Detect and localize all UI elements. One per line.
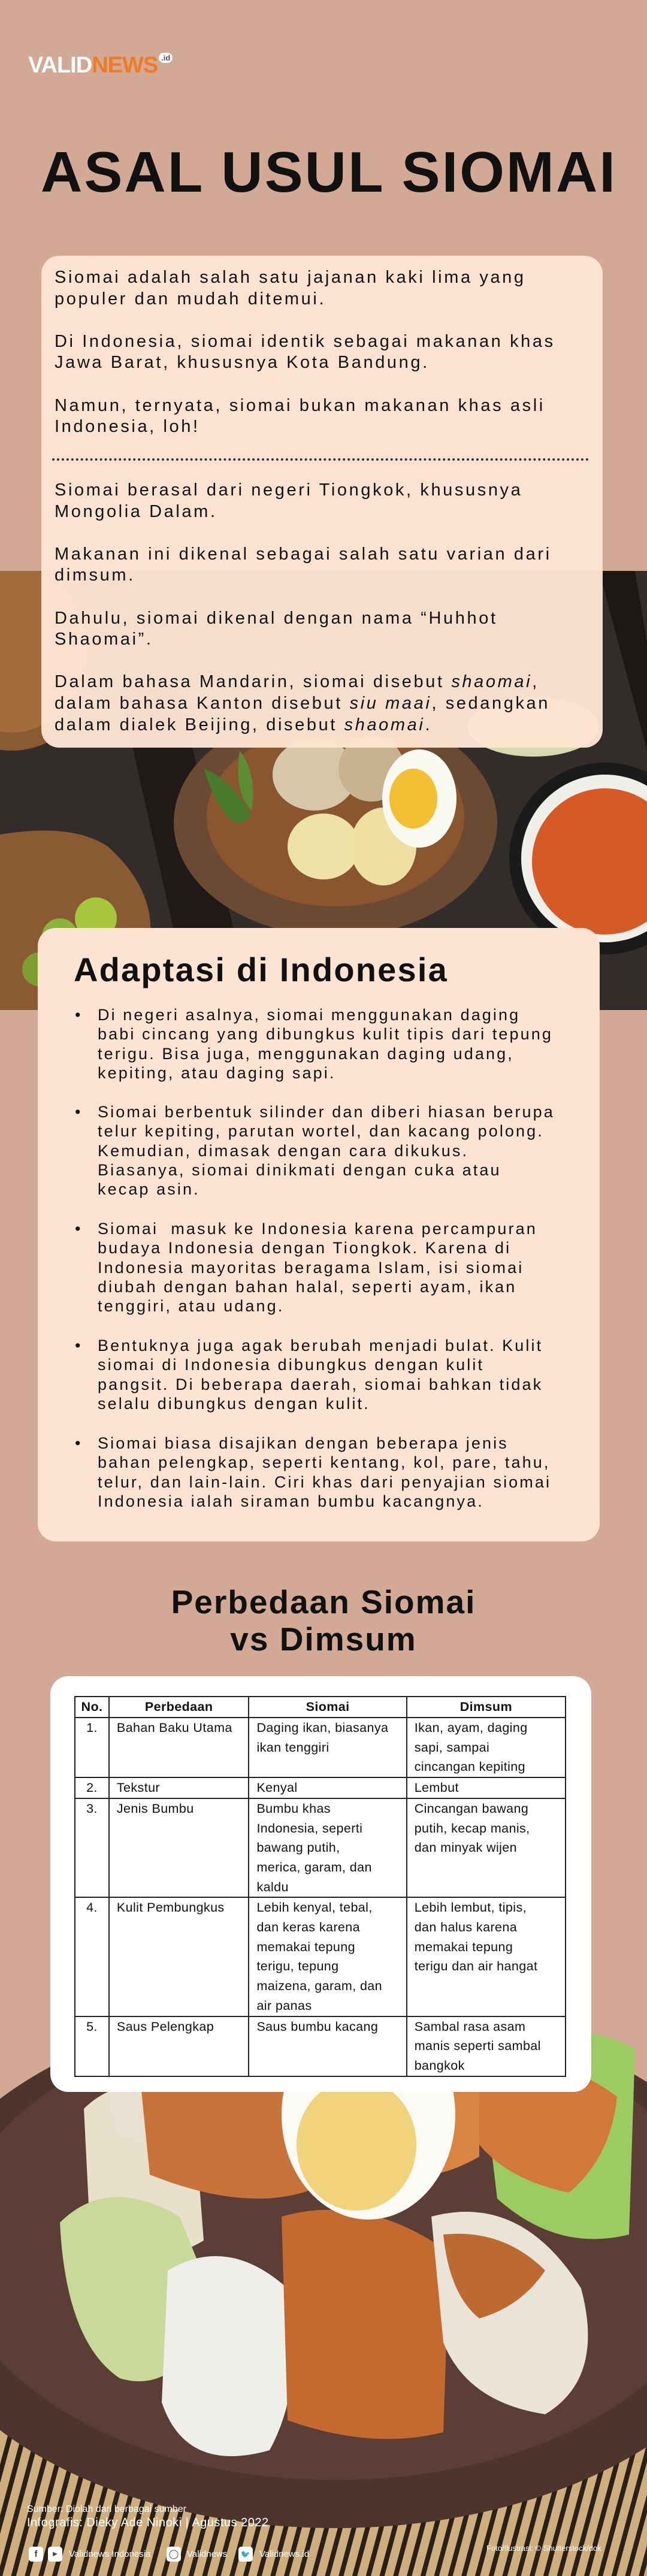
bullet list: tenggiri, atau udang. <box>98 1297 284 1315</box>
text block: intro: populer dan mudah ditemui. <box>55 289 326 309</box>
bullet list: telur, dan lain-lain. Ciri khas dari penyajian siomai <box>98 1473 551 1491</box>
bullet list: budaya Indonesia dengan Tiongkok. Karena di <box>98 1239 511 1257</box>
bottom photo: siomai plate with peanut sauce <box>0 2033 647 2576</box>
text block: origin: Siomai berasal dari negeri Tiongkok, khususnya <box>55 480 522 500</box>
table: Bahan Baku Utama <box>117 1721 232 1735</box>
bullet list: • <box>75 1103 83 1121</box>
table: kaldu <box>256 1880 289 1894</box>
bullet list: Siomai biasa disajikan dengan beberapa jenis <box>98 1434 509 1452</box>
panel: asal usul <box>41 256 603 748</box>
text block: origin: Mongolia Dalam. <box>55 502 217 521</box>
bullet list: kecap asin. <box>98 1180 200 1198</box>
text block: origin: Dalam bahasa Mandarin, siomai disebut shaomai, <box>55 672 539 691</box>
text block: origin: dalam dialek Beijing, disebut shaomai. <box>55 715 432 734</box>
table: merica, garam, dan <box>256 1860 372 1874</box>
table: Dimsum <box>460 1700 512 1714</box>
table: Lebih lembut, tipis, <box>415 1900 527 1915</box>
text block: intro <box>55 268 555 436</box>
bullet list: Indonesia mayoritas beragama Islam, isi siomai <box>98 1259 524 1277</box>
table: air panas <box>256 1998 312 2013</box>
table: 3. <box>86 1801 98 1816</box>
bullet list: pangsit. Di beberapa daerah, siomai bahkan tidak <box>98 1375 543 1393</box>
table: Tekstur <box>117 1780 160 1795</box>
table: 1. <box>86 1721 98 1735</box>
table <box>74 1696 566 2077</box>
bullet list: bahan pelengkap, seperti kentang, kol, pare, tahu, <box>98 1453 550 1471</box>
table: No. <box>81 1700 102 1714</box>
table: Indonesia, seperti <box>256 1821 362 1836</box>
table: bangkok <box>415 2058 465 2073</box>
bullet list: kepiting, atau daging sapi. <box>98 1064 335 1082</box>
table: maizena, garam, dan <box>256 1979 382 1993</box>
table: bawang putih, <box>256 1840 340 1855</box>
heading: Adaptasi di Indonesia <box>74 951 448 988</box>
text block: intro: Jawa Barat, khususnya Kota Bandung. <box>55 353 430 372</box>
table: Lebih kenyal, tebal, <box>256 1900 373 1915</box>
photo credit: Foto/Ilustrasi: © Shutterstock/dok <box>486 2544 601 2553</box>
bullet list: Kemudian, dimasak dengan cara dikukus. <box>98 1142 468 1160</box>
heading: perbedaan siomai vs dimsum <box>171 1583 476 1658</box>
logo: VALIDNEWS.id: VALIDNEWS <box>28 53 158 78</box>
text block: origin: Shaomai”. <box>55 630 153 649</box>
table: Kenyal <box>256 1780 298 1795</box>
bullet list: selalu dibungkus dengan kulit. <box>98 1395 370 1413</box>
bullet list: Bentuknya juga agak berubah menjadi bulat. Kulit <box>98 1337 543 1354</box>
bullet list: telur kepiting, parutan wortel, dan kacang polong. <box>98 1122 544 1140</box>
bullet list: • <box>75 1006 83 1024</box>
table: manis seperti sambal <box>415 2039 541 2053</box>
bullet list: terigu. Bisa juga, menggunakan daging udang, <box>98 1045 514 1063</box>
bullet list: Siomai berbentuk silinder dan diberi hiasan berupa <box>98 1103 555 1121</box>
logo: VALIDNEWS.id: .id <box>161 53 170 62</box>
bullet list: siomai di Indonesia dibungkus dengan kulit <box>98 1356 484 1374</box>
table: memakai tepung <box>256 1940 355 1954</box>
text block: origin <box>55 480 552 734</box>
footer: source & credit <box>27 2504 269 2529</box>
footer: social icons: Validnews Indonesia <box>69 2549 150 2559</box>
table: 4. <box>86 1900 98 1915</box>
table: Ikan, ayam, daging <box>415 1721 528 1735</box>
table: Daging ikan, biasanya ikan tenggiri <box>256 1721 388 1755</box>
table: Bumbu khas <box>256 1801 331 1816</box>
icon: twitter: 🐦 <box>241 2550 250 2559</box>
icon: instagram <box>167 2547 181 2562</box>
table: Lembut <box>415 1780 459 1795</box>
footer: social icons: Validnews <box>187 2549 227 2559</box>
table: dan minyak wijen <box>415 1840 517 1855</box>
table: Saus Pelengkap <box>117 2019 214 2034</box>
bullet list: Di negeri asalnya, siomai menggunakan daging <box>98 1006 520 1024</box>
table: cincangan kepiting <box>415 1759 525 1774</box>
panel: adaptasi di Indonesia <box>38 928 600 1541</box>
table: terigu, tepung <box>256 1959 339 1973</box>
heading: perbedaan siomai vs dimsum: vs Dimsum <box>230 1620 417 1658</box>
icon: twitter <box>238 2547 253 2562</box>
table: Jenis Bumbu <box>117 1801 194 1816</box>
text block: origin: dimsum. <box>55 566 135 585</box>
table: Siomai <box>306 1700 350 1714</box>
icon: instagram: ◯ <box>169 2549 179 2559</box>
text block: intro: Namun, ternyata, siomai bukan makanan khas asli <box>55 396 545 415</box>
table: dan keras karena <box>256 1920 360 1934</box>
text block: origin: Dahulu, siomai dikenal dengan nama “Huhhot <box>55 609 498 628</box>
text block: intro: Di Indonesia, siomai identik sebagai makanan khas <box>55 332 555 351</box>
table: Saus bumbu kacang <box>256 2019 378 2034</box>
icon: youtube <box>48 2547 62 2562</box>
icon: facebook <box>29 2547 43 2562</box>
bullet list: • <box>75 1220 83 1238</box>
bullet list <box>75 1006 555 1510</box>
bullet list: babi cincang yang dibungkus kulit tipis dari tepung <box>98 1025 553 1043</box>
footer: social icons <box>29 2547 309 2562</box>
table: putih, kecap manis, <box>415 1821 530 1836</box>
bullet list: • <box>75 1337 83 1354</box>
table: Cincangan bawang <box>415 1801 528 1816</box>
table: sapi, sampai <box>415 1740 489 1755</box>
panel: comparison table <box>50 1676 591 2092</box>
table: Kulit Pembungkus <box>117 1900 225 1915</box>
icon: facebook: f <box>35 2549 37 2559</box>
footer: source & credit: Infografis: Dieky Ade Ninoki | Agustus 2022 <box>27 2516 269 2529</box>
table: memakai tepung <box>415 1940 513 1954</box>
text block: intro: Indonesia, loh! <box>55 417 200 436</box>
top photo: siomai bowl on dark wood <box>0 571 647 1010</box>
bullet list: diubah dengan bahan halal, seperti ayam, ikan <box>98 1278 516 1296</box>
text block: intro: Siomai adalah salah satu jajanan kaki lima yang <box>55 268 526 287</box>
table: terigu dan air hangat <box>415 1959 537 1973</box>
table: dan halus karena <box>415 1920 517 1934</box>
table: 5. <box>86 2019 98 2034</box>
bullet list: Siomai masuk ke Indonesia karena percampuran <box>98 1220 537 1238</box>
footer: source & credit: Sumber: Diolah dari berbagai sumber <box>27 2504 186 2514</box>
table: Perbedaan <box>145 1700 213 1714</box>
text block: origin: Makanan ini dikenal sebagai salah satu varian dari <box>55 545 552 564</box>
bullet list: Indonesia ialah siraman bumbu kacangnya. <box>98 1492 484 1510</box>
table: 2. <box>86 1780 98 1795</box>
text block: origin: dalam bahasa Kanton disebut siu maai, sedangkan <box>55 694 550 713</box>
heading: perbedaan siomai vs dimsum: Perbedaan Siomai <box>171 1583 476 1620</box>
bullet list: • <box>75 1434 83 1452</box>
title: ASAL USUL SIOMAI <box>41 140 617 204</box>
icon: youtube: ▶ <box>53 2551 58 2557</box>
text: Validnews.id <box>259 2549 309 2559</box>
bullet list: Biasanya, siomai dinikmati dengan cuka atau <box>98 1161 501 1179</box>
table: Sambal rasa asam <box>415 2019 525 2034</box>
